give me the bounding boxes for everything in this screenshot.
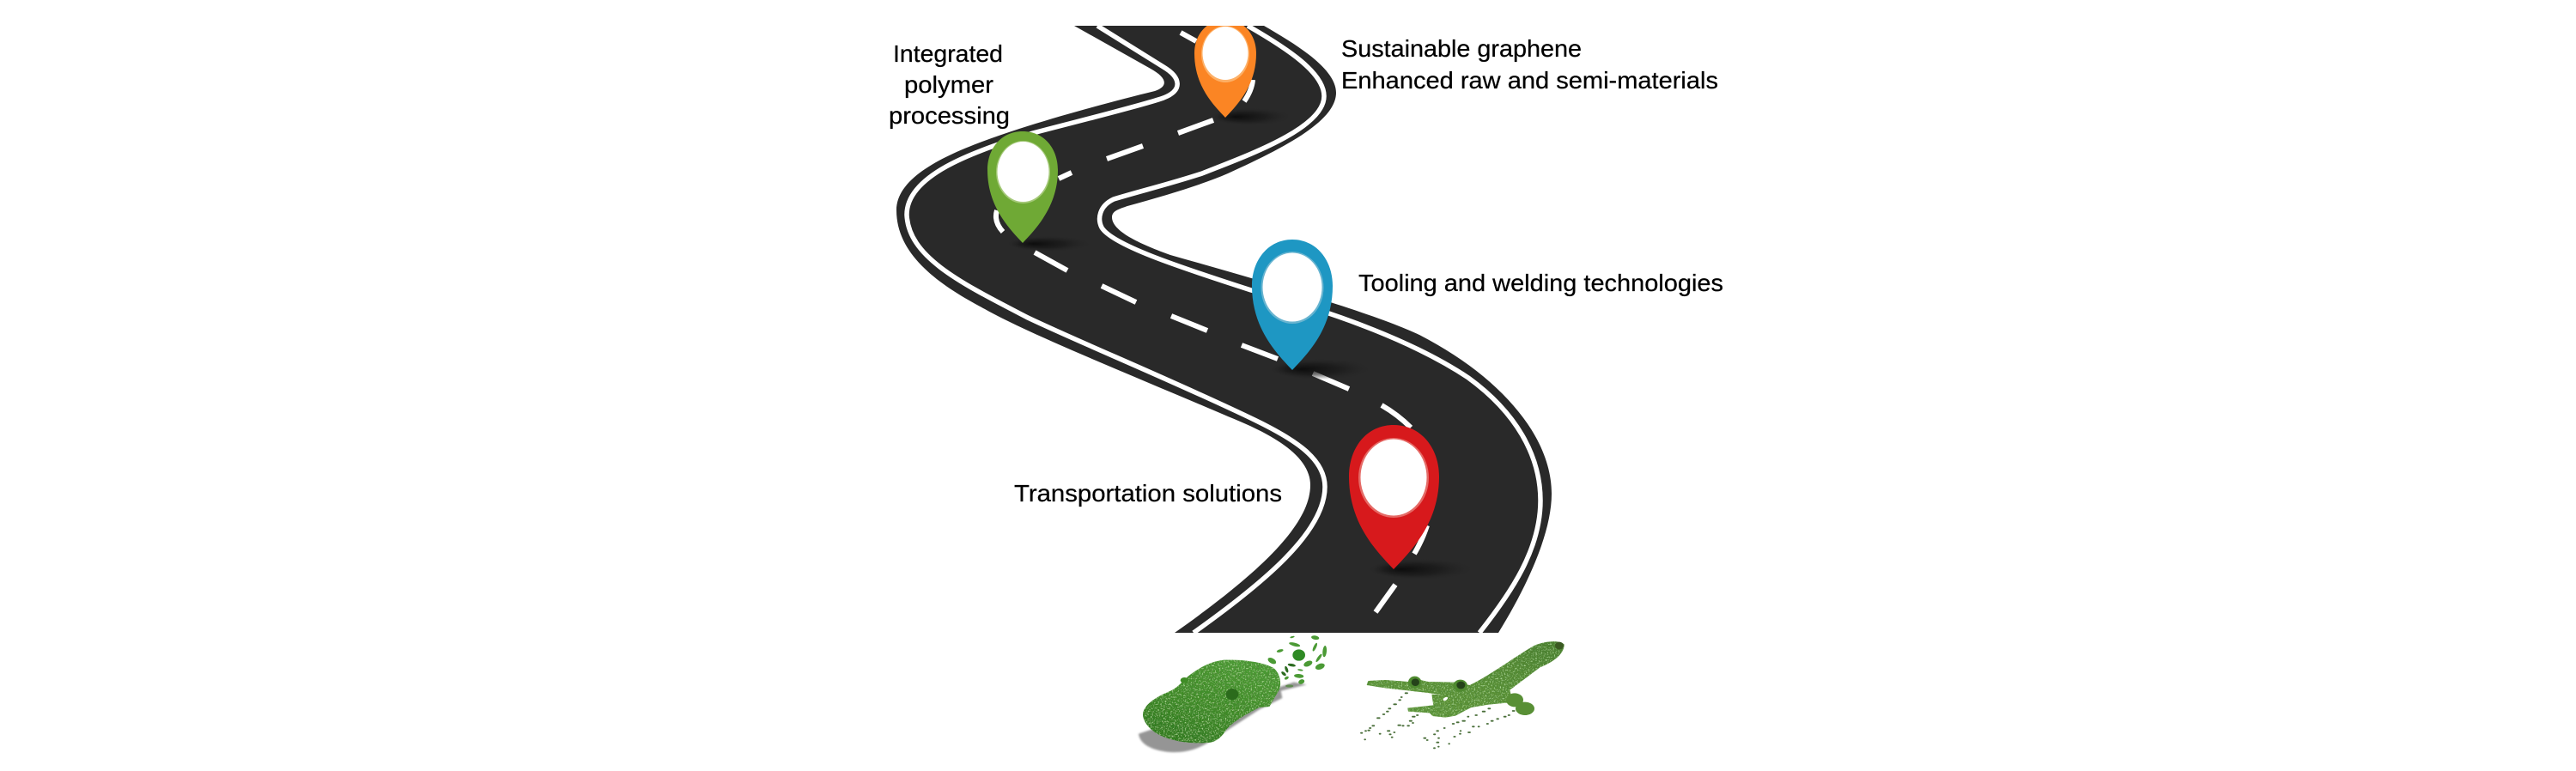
label: transportation solutions: Transportation solutions	[1014, 480, 1282, 507]
pin shadows	[1008, 108, 1473, 580]
left edge line	[907, 26, 1325, 633]
label: tooling and welding: Tooling and welding technologies	[1358, 270, 1723, 296]
label: integrated polymer processing	[889, 40, 1010, 129]
icon: green grass car	[1139, 635, 1327, 752]
label: integrated polymer processing: Integrated	[893, 40, 1003, 67]
plane body	[1367, 641, 1564, 718]
pin: orange	[1194, 20, 1256, 118]
right edge line	[1100, 26, 1540, 633]
pin: red	[1349, 425, 1439, 569]
pin: green	[987, 131, 1058, 243]
label: integrated polymer processing: processing	[889, 102, 1010, 129]
icon: green grass plane	[1361, 641, 1564, 748]
leaves	[1267, 635, 1327, 688]
car body	[1143, 660, 1280, 743]
leaf trails	[1361, 693, 1515, 748]
car shadow	[1139, 683, 1307, 752]
label: sustainable graphene: Sustainable graphene	[1341, 35, 1582, 62]
label: sustainable graphene: Enhanced raw and semi-materials	[1341, 67, 1718, 94]
road surface	[896, 26, 1552, 633]
road with lane markings and pins	[896, 20, 1552, 633]
car mirror	[1181, 677, 1188, 683]
label: sustainable graphene	[1341, 35, 1718, 94]
label: integrated polymer processing: polymer	[904, 71, 993, 98]
centre dashes	[996, 33, 1427, 612]
car wheel arch	[1226, 689, 1238, 700]
pin: blue	[1252, 240, 1333, 370]
engines	[1408, 642, 1564, 715]
